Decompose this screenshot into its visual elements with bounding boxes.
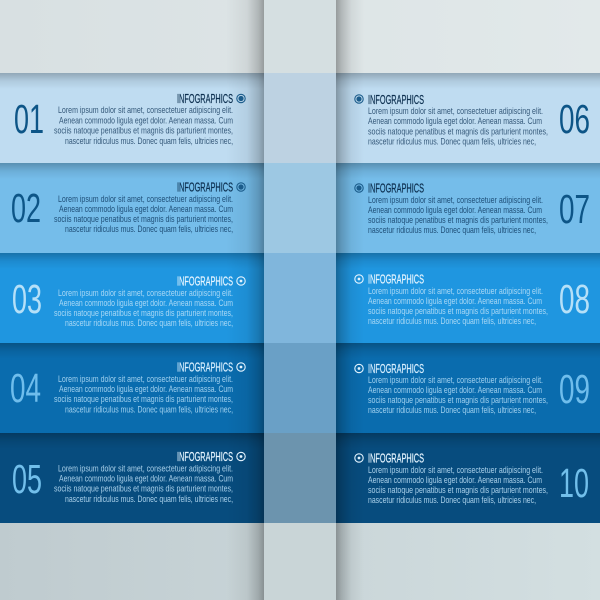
panel 02 [11,180,245,234]
number 02: 02 [11,185,41,231]
text block 05: Aenean commodo ligula eget dolor. Aenean massa. Cum [59,474,233,484]
background: top paper [0,0,600,73]
text block 04 [54,374,233,414]
text block 10: nascetur ridiculus mus. Donec quam felis, ultricies nec, [368,495,536,505]
heading 08: INFOGRAPHICS [368,272,424,286]
text block 08: sociis natoque penatibus et magnis dis parturient montes, [368,306,548,316]
number 05: 05 [12,456,42,502]
text block 03: sociis natoque penatibus et magnis dis parturient montes, [54,308,233,318]
number 04: 04 [10,365,41,411]
text block 09: nascetur ridiculus mus. Donec quam felis, ultricies nec, [368,405,536,415]
heading 04: INFOGRAPHICS [177,360,233,374]
text block 03 [54,288,233,328]
text block 06: nascetur ridiculus mus. Donec quam felis, ultricies nec, [368,136,536,146]
text block 01: Aenean commodo ligula eget dolor. Aenean massa. Cum [59,116,233,126]
band 2 [0,163,600,253]
text block 04: nascetur ridiculus mus. Donec quam felis, ultricies nec, [65,404,233,414]
text block 01: Lorem ipsum dolor sit amet, consectetuer adipiscing elit. [58,105,233,115]
panel 05 [12,450,245,504]
center vertical strip [264,0,336,600]
text block 02 [54,194,233,234]
number 01: 01 [14,96,44,142]
text block 04: Aenean commodo ligula eget dolor. Aenean massa. Cum [59,384,233,394]
panel 06 [355,93,590,146]
text block 03: Aenean commodo ligula eget dolor. Aenean massa. Cum [59,298,233,308]
panel 08 [355,272,590,326]
text block 08: Aenean commodo ligula eget dolor. Aenean massa. Cum [368,296,542,306]
text block 06 [368,106,548,146]
text block 04: Lorem ipsum dolor sit amet, consectetuer adipiscing elit. [58,374,233,384]
text block 09: Aenean commodo ligula eget dolor. Aenean massa. Cum [368,385,542,395]
text block 05 [54,464,233,504]
icon: target 07 [355,184,363,192]
text block 06: Lorem ipsum dolor sit amet, consectetuer adipiscing elit. [368,106,543,116]
panel 01 [14,92,245,146]
icon: target 10 [355,454,363,462]
text block 02: nascetur ridiculus mus. Donec quam felis, ultricies nec, [65,224,233,234]
panel 04 [10,360,245,414]
panel 03 [12,274,245,328]
text block 02: Lorem ipsum dolor sit amet, consectetuer adipiscing elit. [58,194,233,204]
text block 07: nascetur ridiculus mus. Donec quam felis, ultricies nec, [368,225,536,235]
text block 03: Lorem ipsum dolor sit amet, consectetuer adipiscing elit. [58,288,233,298]
text block 07: sociis natoque penatibus et magnis dis parturient montes, [368,215,548,225]
icon: target 04 [237,363,245,371]
text block 07: Aenean commodo ligula eget dolor. Aenean massa. Cum [368,205,542,215]
text block 10: Aenean commodo ligula eget dolor. Aenean massa. Cum [368,475,542,485]
heading 01: INFOGRAPHICS [177,92,233,106]
icon: target 06 [355,95,363,103]
icon: target 08 [355,275,363,283]
text block 10: Lorem ipsum dolor sit amet, consectetuer adipiscing elit. [368,465,543,475]
text block 03: nascetur ridiculus mus. Donec quam felis, ultricies nec, [65,318,233,328]
text block 08 [368,286,548,326]
text block 08: nascetur ridiculus mus. Donec quam felis, ultricies nec, [368,316,536,326]
panel 09 [355,362,590,415]
heading 06: INFOGRAPHICS [368,93,424,107]
text block 09: sociis natoque penatibus et magnis dis parturient montes, [368,395,548,405]
text block 07 [368,195,548,235]
text block 10: sociis natoque penatibus et magnis dis parturient montes, [368,485,548,495]
text block 01 [54,105,233,146]
band 4 [0,343,600,433]
text block 05: Lorem ipsum dolor sit amet, consectetuer adipiscing elit. [58,464,233,474]
heading 05: INFOGRAPHICS [177,450,233,464]
text block 09: Lorem ipsum dolor sit amet, consectetuer adipiscing elit. [368,375,543,385]
band 3 [0,253,600,343]
heading 10: INFOGRAPHICS [368,452,424,466]
number 03: 03 [12,276,42,322]
band 1 [0,73,600,163]
heading 09: INFOGRAPHICS [368,362,424,376]
icon: target 03 [237,277,245,285]
text block 04: sociis natoque penatibus et magnis dis parturient montes, [54,394,233,404]
icon: target 09 [355,364,363,373]
text block 09 [368,375,548,415]
text block 01: sociis natoque penatibus et magnis dis parturient montes, [54,126,233,136]
panel 10 [355,452,589,506]
heading 02: INFOGRAPHICS [177,180,233,194]
band 5 [0,433,600,523]
panel 07 [355,182,590,235]
heading 03: INFOGRAPHICS [177,274,233,288]
text block 06: sociis natoque penatibus et magnis dis parturient montes, [368,126,548,136]
icon: target 01 [237,94,245,103]
icon: target 02 [237,183,245,191]
text block 08: Lorem ipsum dolor sit amet, consectetuer adipiscing elit. [368,286,543,296]
text block 02: Aenean commodo ligula eget dolor. Aenean massa. Cum [59,204,233,214]
text block 02: sociis natoque penatibus et magnis dis parturient montes, [54,214,233,224]
background: bottom paper [0,523,600,600]
text block 05: nascetur ridiculus mus. Donec quam felis, ultricies nec, [65,494,233,504]
text block 10 [368,465,548,505]
text block 05: sociis natoque penatibus et magnis dis parturient montes, [54,484,233,494]
text block 06: Aenean commodo ligula eget dolor. Aenean massa. Cum [368,116,542,126]
icon: target 05 [237,452,245,461]
heading 07: INFOGRAPHICS [368,182,424,196]
text block 07: Lorem ipsum dolor sit amet, consectetuer adipiscing elit. [368,195,543,205]
text block 01: nascetur ridiculus mus. Donec quam felis, ultricies nec, [65,136,233,146]
